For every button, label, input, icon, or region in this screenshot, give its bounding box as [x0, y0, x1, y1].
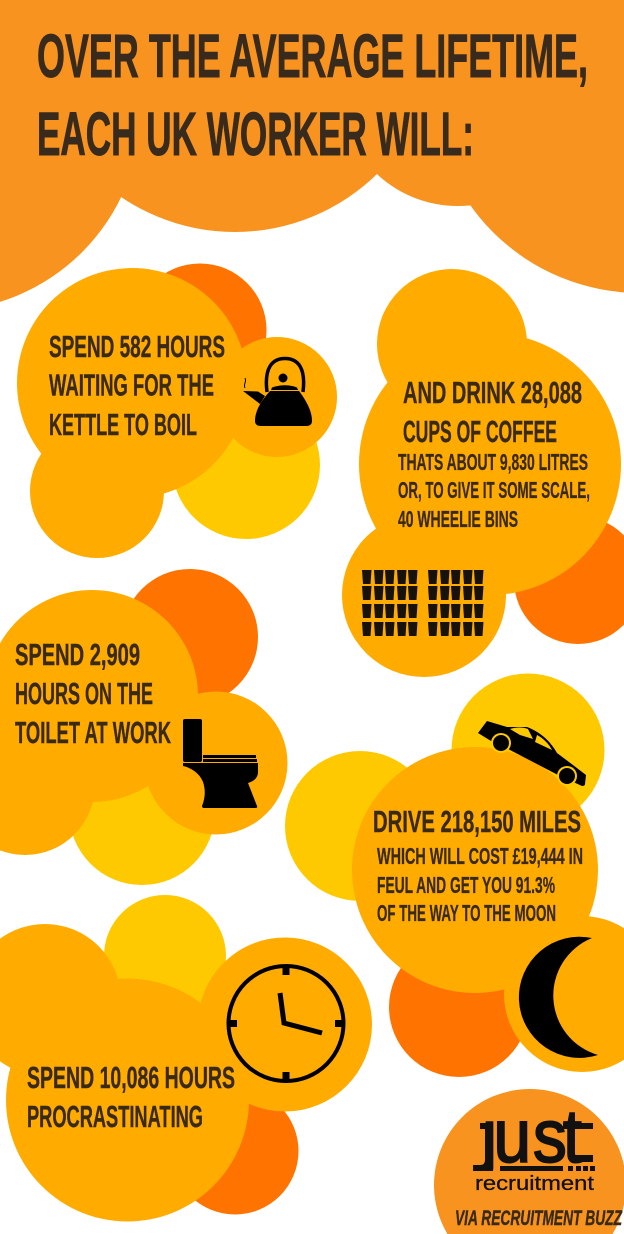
icon: car — [478, 721, 586, 786]
logo wordmark: recruitment — [475, 1173, 595, 1195]
panel: coffee — [342, 269, 624, 677]
title — [37, 22, 588, 168]
kettle text: WAITING FOR THE — [49, 368, 214, 402]
logo wordmark: just — [480, 1095, 582, 1179]
procrastinating text: PROCRASTINATING — [27, 1099, 203, 1134]
coffee text — [398, 375, 590, 532]
logo wordmark — [473, 1112, 595, 1190]
toilet text — [15, 637, 171, 750]
toilet text: TOILET AT WORK — [15, 715, 171, 750]
icon: toilet — [183, 719, 258, 808]
toilet text: HOURS ON THE — [15, 676, 153, 711]
panel: procrastinating — [0, 895, 372, 1222]
header banner — [0, 0, 624, 311]
icon: kettle — [243, 358, 312, 426]
kettle text: KETTLE TO BOIL — [49, 407, 197, 442]
toilet text: SPEND 2,909 — [15, 637, 140, 672]
driving text — [373, 804, 583, 926]
panel: toilet — [0, 569, 288, 885]
icon: clock — [228, 966, 344, 1081]
icon: grid of wheelie bins — [362, 570, 484, 636]
kettle text: SPEND 582 HOURS — [49, 329, 225, 364]
panel: logo badge — [434, 1089, 624, 1234]
coffee text: 40 WHEELIE BINS — [398, 506, 518, 532]
procrastinating text: SPEND 10,086 HOURS — [27, 1060, 235, 1095]
icon: moon — [519, 937, 598, 1058]
panel: driving — [285, 674, 624, 1077]
kettle text — [49, 329, 225, 442]
panel: kettle — [17, 264, 337, 558]
procrastinating text — [27, 1060, 235, 1134]
